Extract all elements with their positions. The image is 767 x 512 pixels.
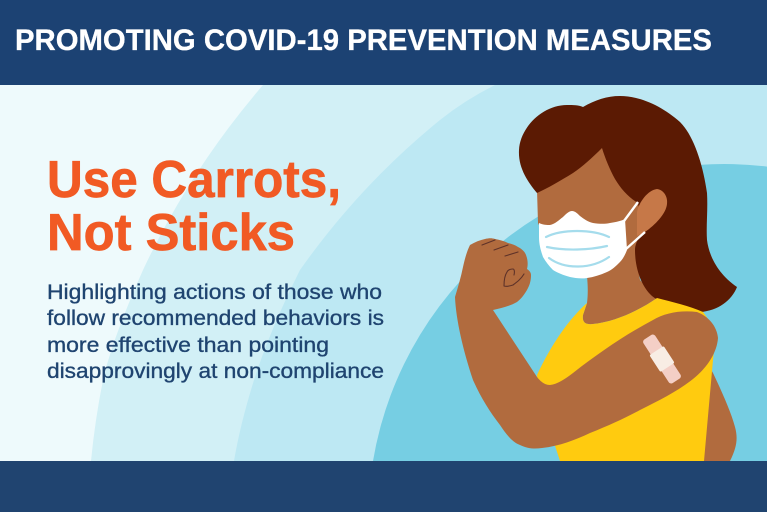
hair: [519, 96, 737, 312]
background with concentric arcs: [0, 85, 767, 461]
body text: Highlighting actions of those who: [47, 280, 382, 304]
header band: [0, 0, 767, 85]
raised arm and fist: [455, 238, 718, 449]
heading: [47, 151, 341, 262]
title: PROMOTING COVID-19 PREVENTION MEASURES: [15, 24, 712, 57]
torso back: [700, 350, 737, 461]
body text: follow recommended behaviors is: [47, 306, 384, 330]
body text: [47, 280, 384, 383]
body text: more effective than pointing: [47, 333, 329, 357]
knuckle lines and thumb: [482, 240, 524, 286]
heading: Not Sticks: [47, 204, 295, 262]
surgical mask: [539, 202, 645, 278]
footer band: [0, 461, 767, 512]
shirt: [537, 298, 716, 461]
ear: [637, 189, 667, 236]
neck and face: [537, 145, 657, 324]
heading: Use Carrots,: [47, 151, 341, 209]
bandage: [641, 333, 683, 385]
body text: disapprovingly at non-compliance: [47, 359, 384, 383]
illustration: woman with mask and bandage: [455, 96, 737, 461]
